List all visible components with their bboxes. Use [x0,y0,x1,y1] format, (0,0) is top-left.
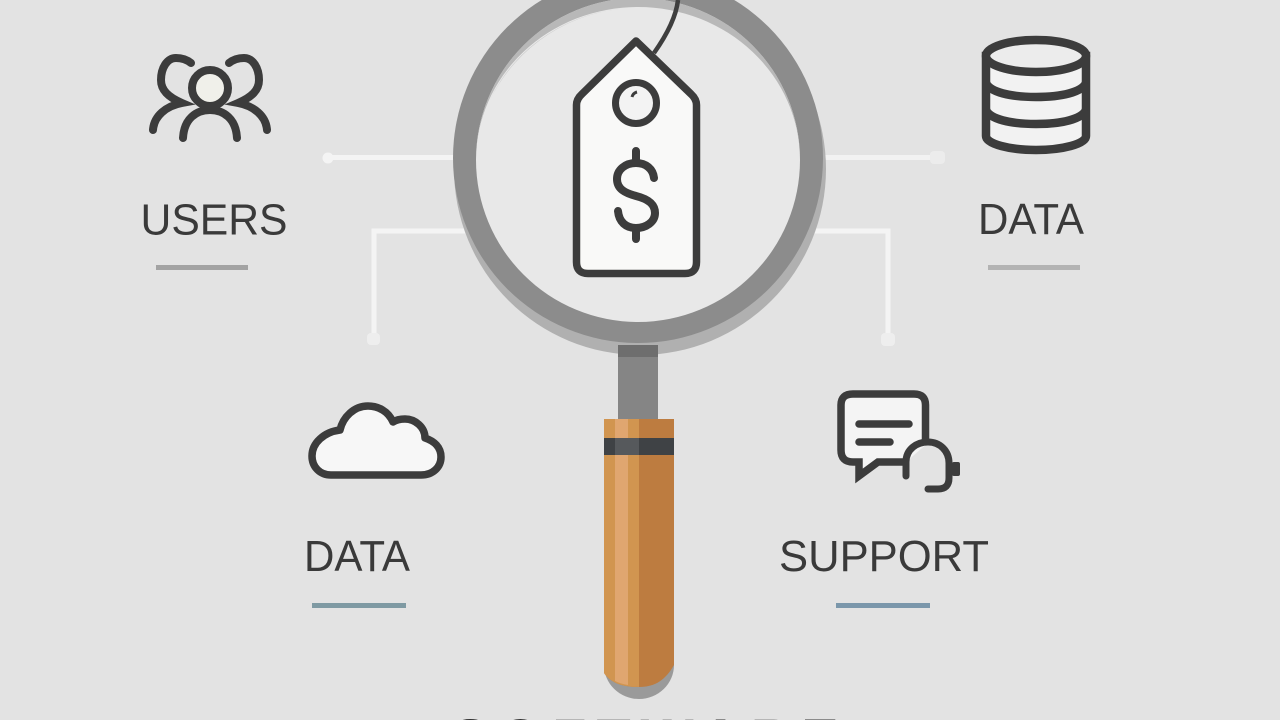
panel: users [140,58,288,270]
icon: cloud [312,406,441,475]
icon: users [153,58,267,138]
chat lines [859,424,909,442]
underline: support [836,603,930,608]
icon: database [986,40,1086,150]
headset [906,442,949,489]
underline: database data [988,265,1080,270]
connector: support [810,231,895,346]
panel: support [779,394,989,608]
wooden grip [604,419,674,699]
icon: support chat [841,394,960,489]
panel: cloud data [304,406,441,608]
tag hole [616,82,656,124]
label: database data: DATA [978,195,1085,244]
icon: price tag [576,0,696,274]
connector: cloud data [367,231,470,345]
label: cloud data: DATA [304,532,411,581]
magnifying glass lens [453,0,826,355]
metal neck [618,345,658,420]
underline: cloud data [312,603,406,608]
panel: database [978,40,1086,270]
chat bubble [841,394,926,476]
connector: database [822,151,945,164]
underline: users [156,265,248,270]
magnifying glass handle [604,345,674,699]
connector: users [322,152,455,164]
dollar symbol [617,151,655,239]
tag string [654,0,678,53]
tag body [576,41,696,274]
label: users: USERS [140,196,288,244]
label: support: SUPPORT [779,532,989,581]
